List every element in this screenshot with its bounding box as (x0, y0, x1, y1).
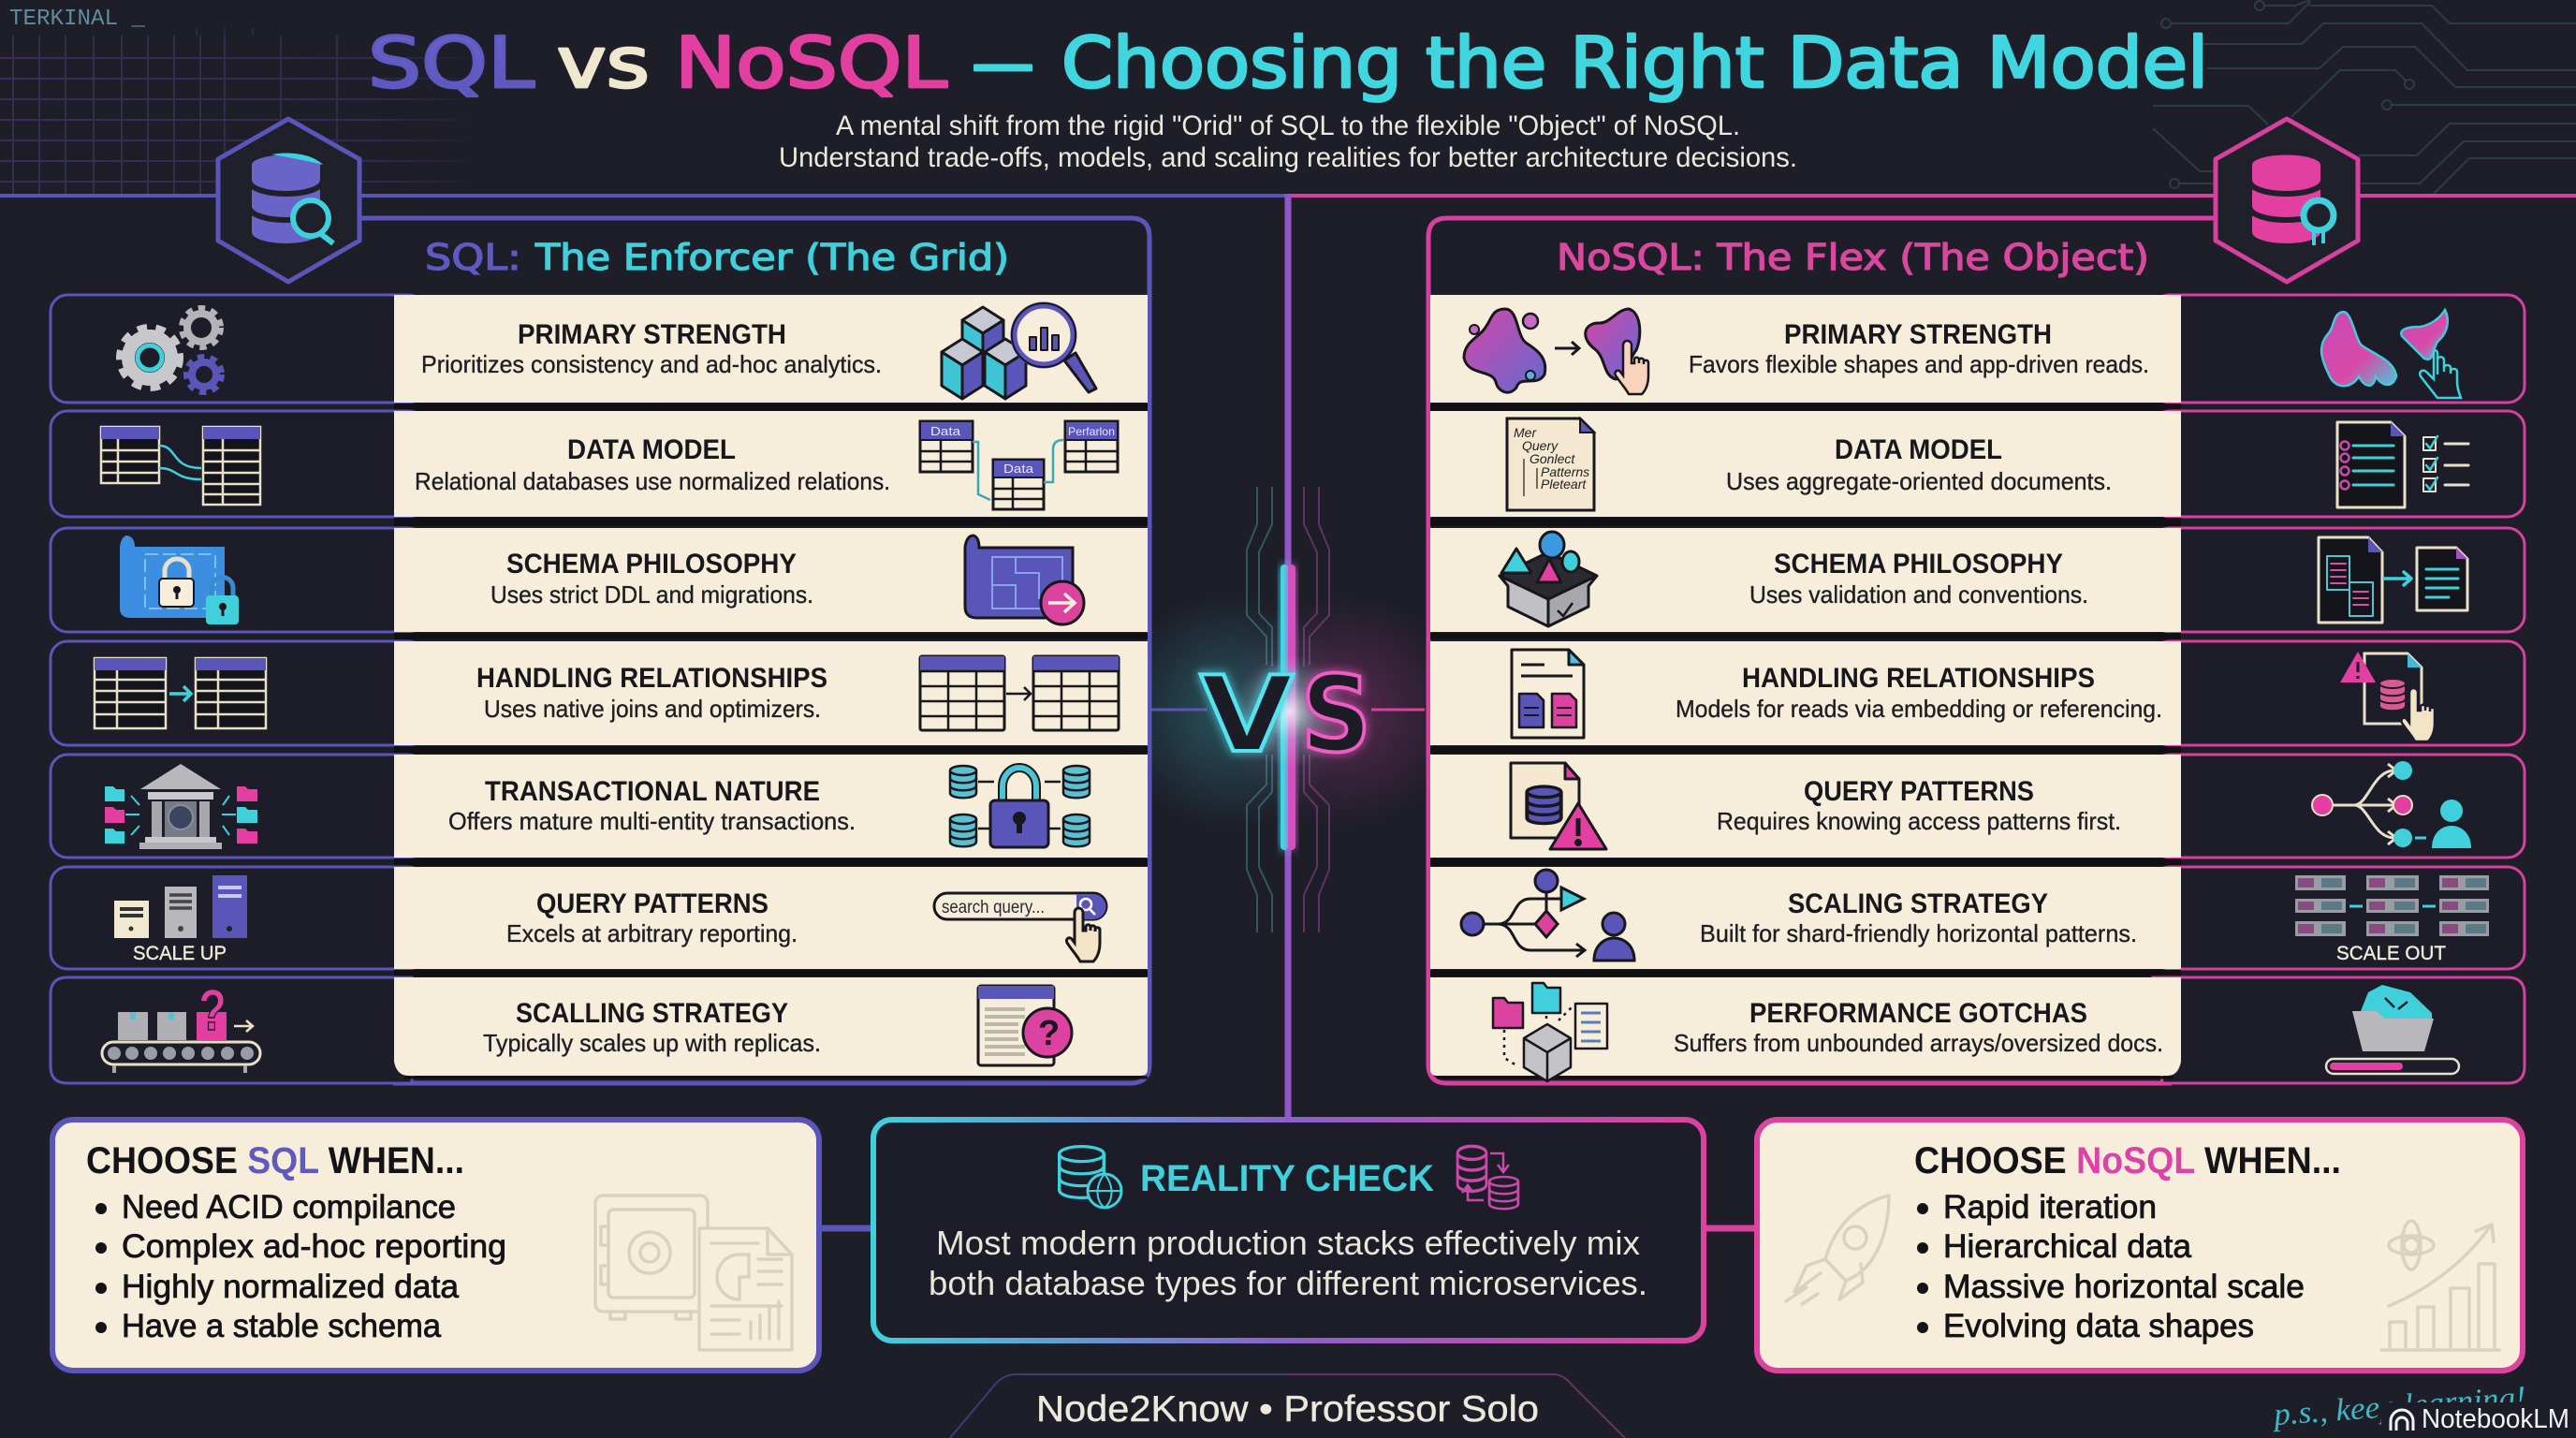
text: data model: Uses aggregate-oriented documents. (1726, 467, 2112, 495)
NoSQL row: handling relationships (1430, 641, 2525, 754)
SQL row: handling relationships (51, 641, 1148, 754)
subtitle: Understand trade-offs, models, and scaling realities for better architecture decisions. (779, 142, 1797, 173)
icon: search bar with hand: search query... (942, 898, 1045, 917)
icon: watermark rocket (1786, 1196, 1889, 1304)
text: query patterns: QUERY PATTERNS (1804, 776, 2034, 807)
icon: window with question: ? (1038, 1014, 1060, 1053)
SQL reasons list: Have a stable schema (122, 1308, 442, 1344)
text: scaling strategy (1700, 888, 2137, 947)
NoSQL heading: NoSQL: The Flex (The Object) (1557, 237, 2149, 278)
NoSQL reasons list (1917, 1189, 2305, 1344)
text: handling relationships: HANDLING RELATIONSHIPS (1742, 663, 2095, 694)
text: query patterns: Excels at arbitrary reporting. (506, 919, 798, 947)
icon: blueprint migrate (965, 536, 1084, 624)
terminal label: TERKINAL _ (9, 7, 146, 32)
panel: SQL the enforcer (51, 218, 1149, 1083)
callout: choose SQL when (52, 1120, 819, 1371)
header rule and center divider (0, 194, 2576, 1118)
NoSQL reasons list: Hierarchical data (1943, 1228, 2192, 1265)
SQL row: data model (51, 411, 1148, 526)
NoSQL row: primary strength (1430, 295, 2525, 411)
text: data model: Relational databases use normalized relations. (415, 467, 890, 495)
title: SQL (368, 22, 534, 104)
text: handling relationships (476, 663, 827, 723)
icon: warning doc with hand (2340, 652, 2435, 741)
SQL heading: The Enforcer (The Grid) (534, 237, 1009, 278)
text: query patterns (1717, 776, 2121, 835)
icon: cyan database globe (1060, 1147, 1121, 1208)
icon: scale out racks (2295, 875, 2489, 964)
text: scaling strategy: Built for shard-friendly horizontal patterns. (1700, 919, 2137, 947)
icon: overflowing folder (2326, 985, 2459, 1074)
text: schema philosophy: SCHEMA PHILOSOPHY (1774, 549, 2063, 580)
icon: handwritten query doc: Query (1522, 438, 1559, 453)
text: performance gotchas: PERFORMANCE GOTCHAS (1749, 998, 2087, 1029)
text: primary strength (1689, 319, 2149, 378)
text: data model (1726, 434, 2112, 495)
icon: scale up servers: SCALE UP (133, 943, 227, 964)
icon: lock with databases (950, 766, 1090, 847)
SQL row: schema philosophy (51, 528, 1148, 639)
icon: embedded documents (1512, 650, 1584, 738)
connector: SQL box to reality check (821, 1225, 871, 1232)
icon: branching nodes to user (2312, 761, 2471, 848)
icon: joined tables dark (95, 658, 266, 728)
connector: reality check to NoSQL box (1705, 1225, 1755, 1232)
text: scalling strategy: Typically scales up with replicas. (483, 1029, 821, 1057)
icon: watermark safe and report (595, 1196, 792, 1350)
text: data model (415, 434, 890, 495)
title: NoSQL (675, 22, 947, 104)
text: handling relationships: Uses native joins and optimizers. (484, 695, 821, 723)
center circuit traces (1247, 487, 1329, 932)
heading: choose SQL: CHOOSE SQL WHEN... (86, 1140, 464, 1181)
text: handling relationships (1676, 663, 2162, 723)
SQL row: transactional nature (51, 755, 1148, 866)
text: primary strength (421, 319, 882, 378)
icon: blob gesture (2321, 310, 2461, 398)
vs badge: V (1200, 654, 1294, 776)
icon: scale out racks: SCALE OUT (2336, 943, 2446, 964)
subtitle (779, 110, 1797, 173)
icon: data tables: Data (930, 424, 961, 438)
icon: handwritten query doc (1507, 418, 1594, 510)
NoSQL row: performance gotchas (1430, 977, 2525, 1083)
NotebookLM badge: NotebookLM (2422, 1404, 2569, 1434)
icon: doc with warning (1511, 763, 1606, 849)
text: primary strength: PRIMARY STRENGTH (518, 319, 786, 350)
text: data model: DATA MODEL (567, 434, 736, 465)
title: vs (557, 22, 650, 104)
icon: watermark chart (2381, 1221, 2499, 1350)
SQL reasons list: Complex ad-hoc reporting (122, 1228, 506, 1265)
icon: data tables (920, 421, 1118, 509)
icon: related tables dark (101, 427, 260, 505)
SQL heading: SQL: (425, 237, 521, 278)
SQL reasons list: Highly normalized data (122, 1269, 460, 1305)
text: primary strength: Prioritizes consistency and ad-hoc analytics. (421, 350, 882, 378)
text: transactional nature (448, 776, 856, 835)
icon: blueprint with locks (120, 536, 239, 624)
text: performance gotchas (1674, 998, 2163, 1057)
text: query patterns: QUERY PATTERNS (536, 888, 768, 919)
NoSQL row: schema philosophy (1430, 528, 2525, 639)
icon: folders cube doc (1493, 983, 1607, 1081)
text: transactional nature: TRANSACTIONAL NATURE (485, 776, 820, 807)
footer tab: byline (950, 1374, 1625, 1438)
SQL database hexagon (218, 119, 359, 282)
icon: data tables: Data (1003, 462, 1034, 476)
background circuit traces: top right (2153, 0, 2576, 194)
NoSQL row: query patterns (1430, 755, 2525, 866)
reality check body: Most modern production stacks effectively mix (936, 1224, 1640, 1262)
divider join (1284, 1116, 1292, 1120)
text: query patterns: Requires knowing access patterns first. (1717, 807, 2121, 835)
text: schema philosophy: Uses strict DDL and migrations. (490, 580, 813, 609)
text: data model: DATA MODEL (1835, 434, 2002, 465)
icon: blob transform (1464, 309, 1648, 394)
icon: conveyor: ? (198, 978, 227, 1043)
SQL row: query patterns (51, 867, 1148, 976)
text: handling relationships: Models for reads via embedding or referencing. (1676, 695, 2162, 723)
icon: data tables: Perfarlon (1068, 425, 1115, 438)
NotebookLM badge (2381, 1402, 2576, 1438)
title (368, 22, 2208, 104)
text: scalling strategy: SCALLING STRATEGY (516, 998, 788, 1029)
reality check body (929, 1224, 1647, 1302)
icon: scale up servers (114, 875, 247, 964)
SQL row: primary strength (51, 295, 1148, 411)
icon: search bar with hand (934, 893, 1106, 961)
icon: cubes and magnifier (942, 303, 1096, 399)
SQL reasons list: Need ACID compilance (122, 1189, 456, 1225)
callout: reality check (873, 1116, 1704, 1341)
NoSQL row: scaling strategy (1430, 867, 2525, 976)
icon: handwritten query doc: Patterns (1541, 464, 1589, 479)
icon: window with question (978, 986, 1072, 1065)
NoSQL row: data model (1430, 411, 2525, 526)
heading: reality check: REALITY CHECK (1140, 1158, 1434, 1199)
text: schema philosophy (490, 549, 813, 609)
panel: NoSQL the flex (1428, 218, 2525, 1083)
SQL row: scaling strategy (51, 977, 1148, 1083)
text: scalling strategy (483, 998, 821, 1057)
text: primary strength: PRIMARY STRENGTH (1784, 319, 2052, 350)
subtitle: A mental shift from the rigid "Orid" of SQL to the flexible "Object" of NoSQL. (836, 110, 1740, 141)
icon: conveyor (102, 978, 260, 1073)
heading: choose NoSQL: CHOOSE NoSQL WHEN... (1914, 1140, 2341, 1181)
title: — (972, 22, 1034, 104)
text: transactional nature: Offers mature multi-entity transactions. (448, 807, 856, 835)
text: schema philosophy (1749, 549, 2088, 609)
NoSQL reasons list: Evolving data shapes (1943, 1308, 2254, 1344)
icon: document with checklist (2337, 422, 2468, 507)
reality check body: both database types for different microservices. (929, 1264, 1647, 1302)
icon: gears (121, 309, 221, 391)
icon: handwritten query doc: Pleteart (1541, 477, 1587, 492)
vs badge (1114, 565, 1460, 850)
icon: joined tables (920, 656, 1119, 730)
footer tab: byline: Node2Know • Professor Solo (1036, 1389, 1539, 1430)
icon: flowchart (1461, 870, 1634, 961)
text: handling relationships: HANDLING RELATIONSHIPS (476, 663, 827, 694)
NoSQL reasons list: Massive horizontal scale (1943, 1269, 2305, 1305)
text: performance gotchas: Suffers from unbounded arrays/oversized docs. (1674, 1029, 2163, 1057)
text: schema philosophy: SCHEMA PHILOSOPHY (506, 549, 797, 580)
vs badge: S (1301, 654, 1371, 776)
icon: handwritten query doc: Gonlect (1530, 451, 1575, 466)
text: primary strength: Favors flexible shapes and app-driven reads. (1689, 350, 2149, 378)
icon: open box with shapes (1500, 532, 1597, 626)
text: scaling strategy: SCALING STRATEGY (1788, 888, 2048, 919)
SQL panel frame (359, 218, 1149, 1083)
callout: choose NoSQL when (1757, 1120, 2523, 1371)
text: schema philosophy: Uses validation and conventions. (1749, 580, 2088, 609)
SQL reasons list (95, 1189, 506, 1344)
handwritten note: p.s., keep learning! (2271, 1380, 2527, 1432)
icon: handwritten query doc: Mer (1514, 425, 1537, 440)
icon: magenta database sync (1457, 1146, 1518, 1209)
NoSQL panel frame (1428, 218, 2247, 1083)
text: query patterns (506, 888, 798, 947)
title: Choosing the Right Data Model (1061, 22, 2208, 104)
NoSQL database hexagon (2216, 119, 2358, 282)
icon: document merge (2319, 537, 2467, 623)
NoSQL reasons list: Rapid iteration (1943, 1189, 2157, 1225)
icon: bank with folders (105, 764, 257, 849)
background grid: top left (0, 28, 461, 194)
